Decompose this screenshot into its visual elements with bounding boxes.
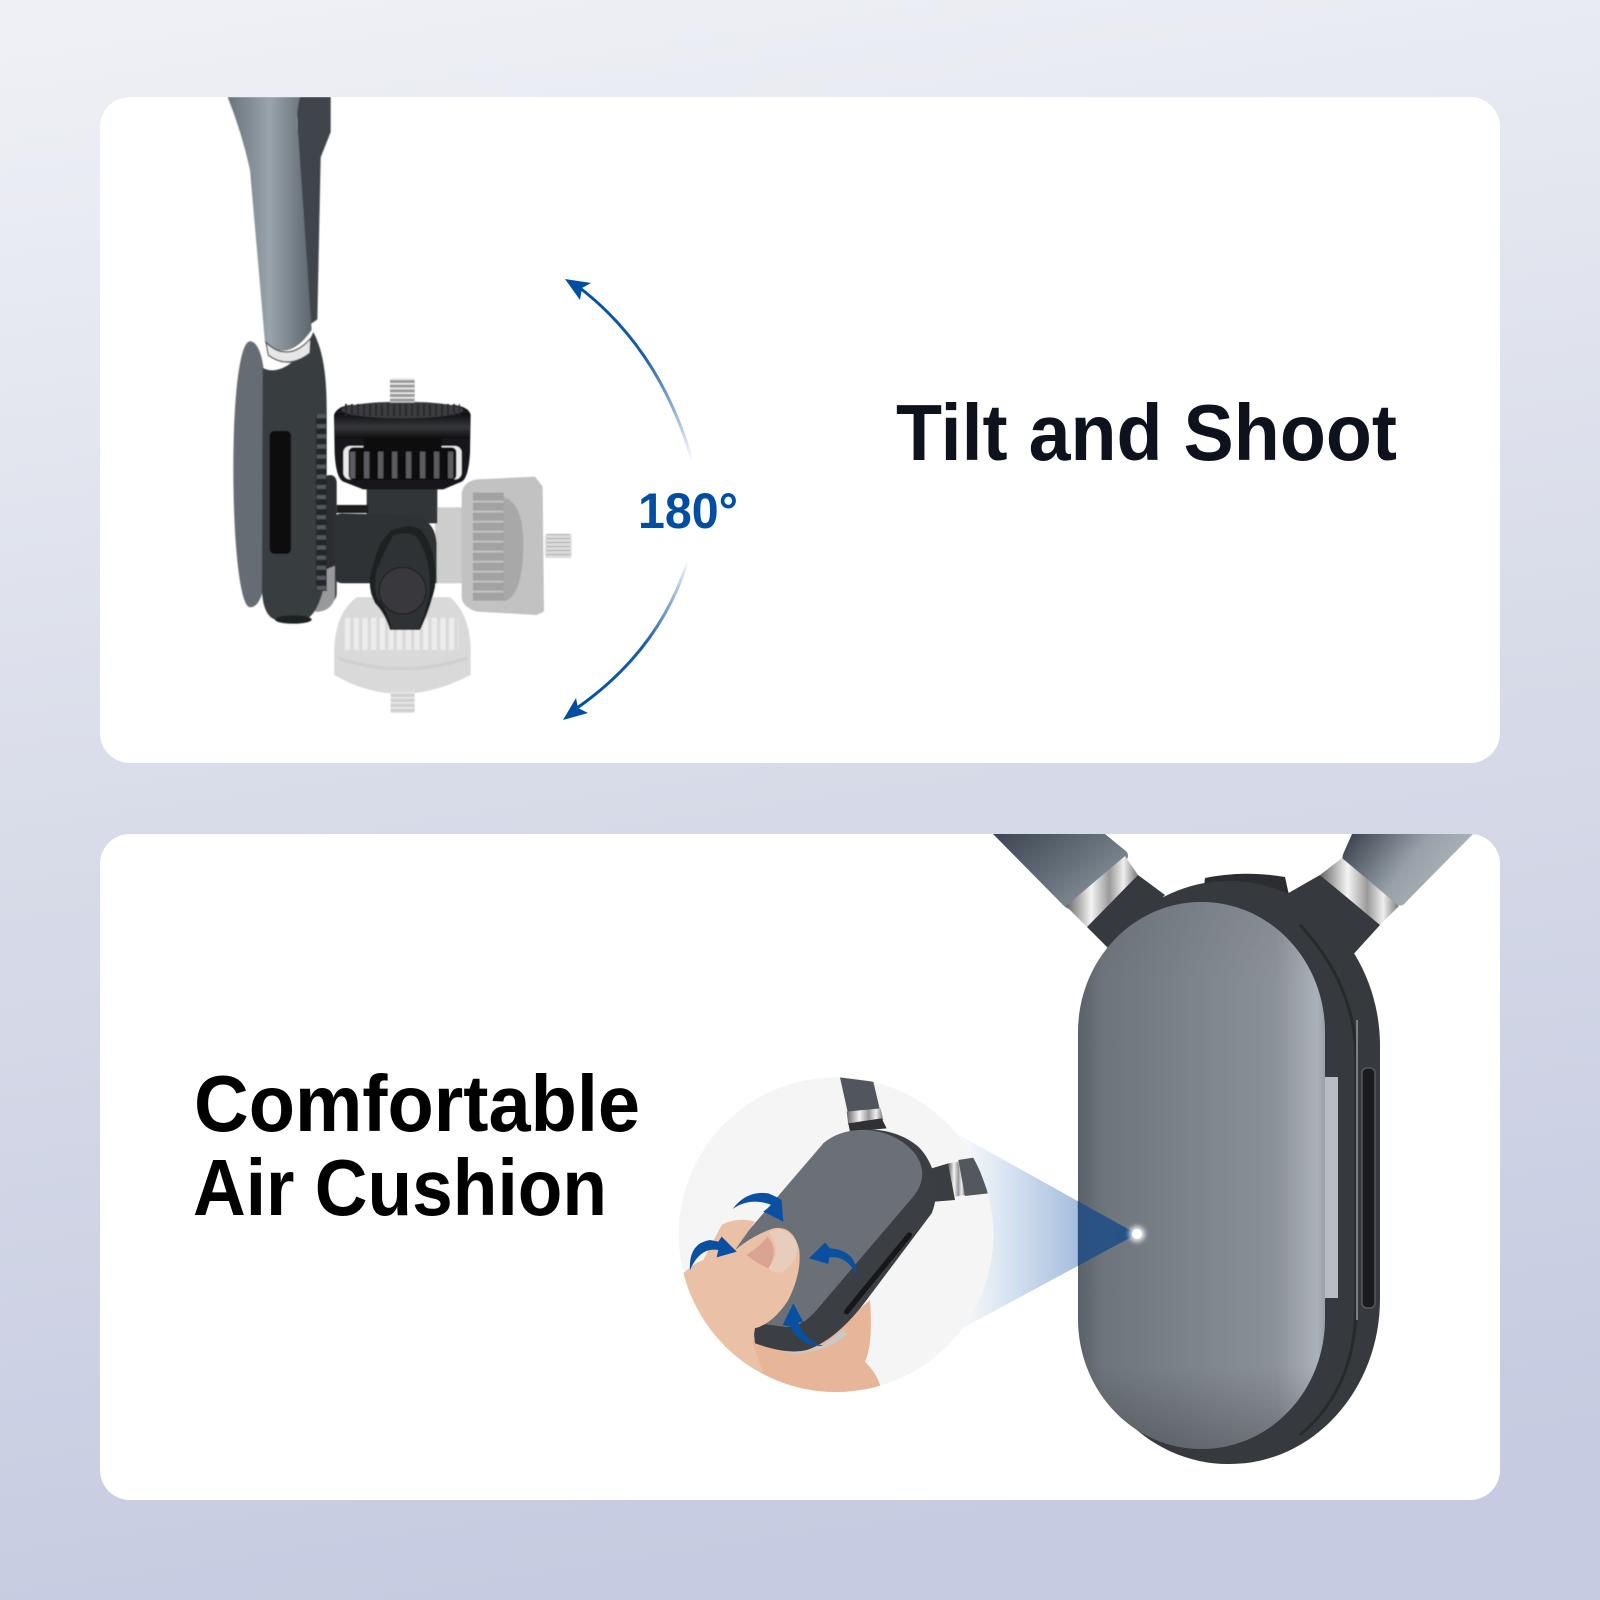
light strip behind cushion [1325,1077,1338,1298]
side slot [1362,1068,1375,1308]
panel: comfortable air cushion [100,834,1500,1500]
device body [262,332,327,619]
neck and body [228,97,337,624]
180 degree arc arrow: bottom [563,560,688,720]
mount disc [323,475,337,601]
inset: side slot [847,1235,909,1312]
angle label: 180° [638,483,738,539]
panel: tilt and shoot [100,97,1500,763]
air cushion edge [233,341,265,607]
pivot arm [335,513,437,583]
mount head assembly [334,378,572,630]
wing knob [370,527,435,630]
knurled wheel [343,446,462,479]
pointer dot [1129,1226,1145,1242]
inset: rear finger and lower hand [717,1300,882,1393]
body rim band [1300,925,1356,1435]
left neck arm [993,834,1165,950]
carbon strip [316,414,327,591]
inset: top arm [840,1077,887,1132]
mounting screw [390,378,415,402]
ghost mount: right position [435,477,572,615]
feet screw [275,615,312,624]
grey air cushion [1078,902,1325,1449]
body rim highlight [1356,1020,1358,1320]
mount head frame [334,405,471,489]
side slot [270,431,291,554]
heading: tilt and shoot: Tilt and Shoot [896,388,1397,477]
inset: cushion [723,1130,922,1327]
ghost mount: lower position [334,597,471,713]
chrome base [315,566,335,612]
inset: lower bright rim [773,1330,847,1353]
180 degree arc arrow: top [565,279,692,460]
inset: thumbnail [768,1230,797,1273]
inset: blue squeeze arrows [690,1193,857,1346]
inset: device body [753,1130,936,1351]
neck stem [367,485,437,523]
neck arm front [228,97,312,351]
inset: thumb shade [747,1237,774,1268]
neck arm back [297,97,331,326]
product: tilting mount side view [228,97,572,713]
top dial [1203,874,1289,895]
heading: comfortable air cushion: Comfortable [194,1059,640,1148]
heading: comfortable air cushion: Air Cushion [193,1143,607,1232]
top plate [341,402,463,418]
dark device body [1078,881,1380,1464]
inset: hand [683,1220,800,1373]
right neck arm [1285,834,1473,958]
zoom cone [950,1130,1137,1335]
heading: comfortable air cushion [193,1059,640,1232]
inset: squeezing the cushion [679,1077,993,1393]
large device with neck arms [993,834,1473,1464]
chrome ring [266,338,311,362]
inset: side arm [932,1157,988,1202]
